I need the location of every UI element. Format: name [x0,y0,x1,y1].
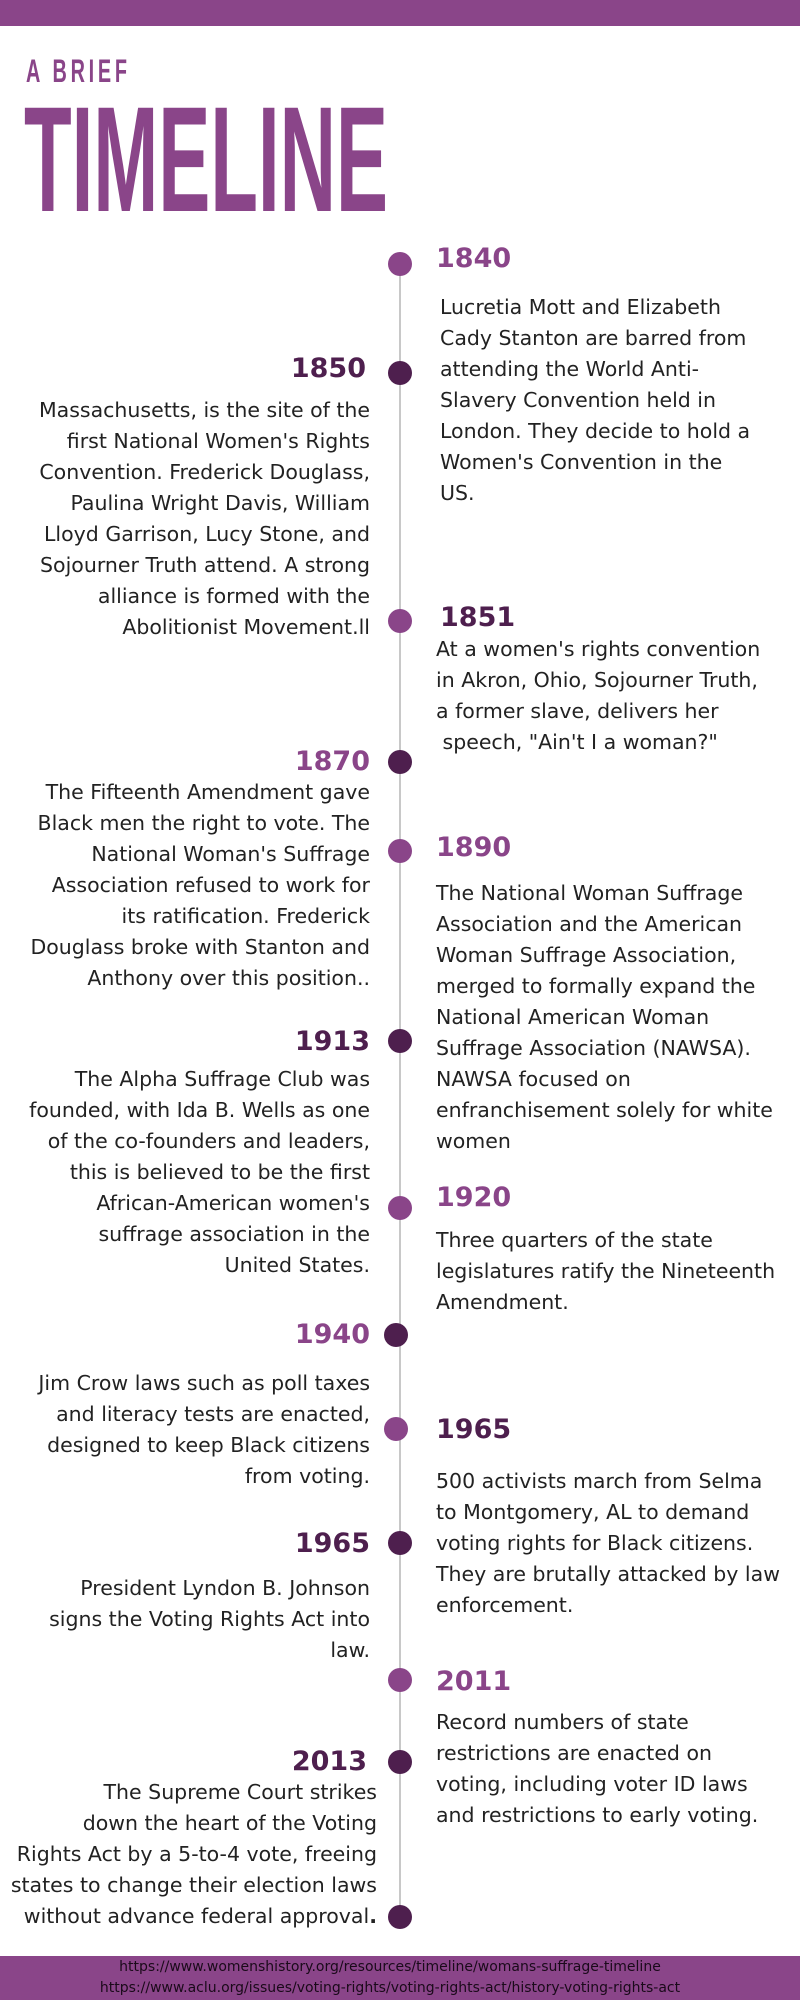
entry 1840 [436,243,750,505]
entry 1965 left: signs the Voting Rights Act into [49,1607,370,1631]
entry 1913 [29,1026,370,1277]
entry 1890: merged to formally expand the [436,974,755,998]
entry 1870: its ratification. Frederick [122,904,370,928]
entry 1840: Slavery Convention held in [440,388,716,412]
entry 1965 right: enforcement. [436,1593,573,1617]
entry 1920: Three quarters of the state [436,1228,713,1252]
entry 1850: first National Women's Rights [67,429,370,453]
entry 1870: 1870 [295,746,370,777]
entry 1965 right [436,1414,780,1617]
entry 1940: 1940 [295,1319,370,1350]
entry 1870: Black men the right to vote. The [38,811,370,835]
entry 1851: speech, "Ain't I a woman?" [443,730,718,754]
entry 1965 right: to Montgomery, AL to demand [436,1500,749,1524]
entry 1940: and literacy tests are enacted, [56,1402,370,1426]
entry 2013: 2013 [292,1746,367,1777]
entry 1913: The Alpha Suffrage Club was [75,1067,370,1091]
footer with sources [0,1956,800,2000]
footer with sources: https://www.aclu.org/issues/voting-rights/voting-rights-act/history-voting-rights-act [100,1980,680,1996]
entry 1840: 1840 [436,243,511,274]
entry 1965 right: 1965 [436,1414,511,1445]
entry 1920: Amendment. [436,1290,569,1314]
entry 1890: The National Woman Suffrage [436,881,743,905]
entry 1840: attending the World Anti- [440,357,699,381]
entry 1890 [436,832,773,1153]
entry 2013 [11,1746,377,1928]
entry 2011: voting, including voter ID laws [436,1772,748,1796]
entry 1870: Association refused to work for [52,873,370,897]
entry 1840: US. [440,481,475,505]
entry 1920: 1920 [436,1182,511,1213]
entry 1913: this is believed to be the first [70,1160,370,1184]
entry 1851: 1851 [440,602,515,633]
entry 1851 [436,602,760,754]
entry 2011: restrictions are enacted on [436,1741,712,1765]
entry 1870: The Fifteenth Amendment gave [46,780,370,804]
entry 1940: from voting. [245,1464,370,1488]
entry 1870 [30,746,370,990]
entry 1890: NAWSA focused on [436,1067,631,1091]
entry 1965 right: voting rights for Black citizens. [436,1531,753,1555]
entry 2011: and restrictions to early voting. [436,1803,758,1827]
text: United States. [225,1253,370,1277]
entry 1850: Convention. Frederick Douglass, [39,460,370,484]
entry 1840: Women's Convention in the [440,450,722,474]
entry 2011: Record numbers of state [436,1710,689,1734]
top bar [0,0,800,26]
entry 1851: a former slave, delivers her [436,699,719,723]
subtitle: a brief: A BRIEF [26,53,131,89]
entry 2013: The Supreme Court strikes [104,1780,377,1804]
entry 2013: Rights Act by a 5-to-4 vote, freeing [17,1842,377,1866]
entry 1890: enfranchisement solely for white [436,1098,773,1122]
entry 1965 left: President Lyndon B. Johnson [80,1576,370,1600]
entry 1890: Woman Suffrage Association, [436,943,736,967]
entry 1850: Massachusetts, is the site of the [39,398,370,422]
entry 1965 right: They are brutally attacked by law [436,1562,780,1586]
entry 1965 left [49,1528,370,1662]
entry 1850: Lloyd Garrison, Lucy Stone, and [44,522,370,546]
entry 1850: alliance is formed with the [98,584,370,608]
entry 1913: of the co-founders and leaders, [48,1129,370,1153]
entry 1940 [37,1319,370,1488]
entry 1890: Suffrage Association (NAWSA). [436,1036,751,1060]
entry 1851: in Akron, Ohio, Sojourner Truth, [436,668,758,692]
entry 1965 right: 500 activists march from Selma [436,1469,762,1493]
entry 1890: Association and the American [436,912,742,936]
title: TIMELINE [24,75,388,243]
entry 1890: women [436,1129,511,1153]
entry 2011 [436,1666,758,1827]
entry 2013: without advance federal approval. [24,1904,377,1928]
entry 1920 [436,1182,775,1314]
entry 1965 left: law. [330,1638,370,1662]
entry 1913: 1913 [295,1026,370,1057]
entry 1920: legislatures ratify the Nineteenth [436,1259,775,1283]
entry 1913: founded, with Ida B. Wells as one [29,1098,370,1122]
entry 1851: At a women's rights convention [436,637,760,661]
entry 1850: Sojourner Truth attend. A strong [40,553,370,577]
entry 2011: 2011 [436,1666,511,1697]
entry 2013: down the heart of the Voting [83,1811,377,1835]
entry 2013: states to change their election laws [11,1873,377,1897]
entry 1840: Lucretia Mott and Elizabeth [440,295,721,319]
entry 1840: London. They decide to hold a [440,419,750,443]
entry 1850: Paulina Wright Davis, William [70,491,370,515]
entry 1940: Jim Crow laws such as poll taxes [38,1371,370,1395]
entry 1890: National American Woman [436,1005,709,1029]
entry 1840: Cady Stanton are barred from [440,326,746,350]
entry 1850: Abolitionist Movement.ll [122,615,370,639]
footer with sources: https://www.womenshistory.org/resources/timeline/womans-suffrage-timeline [119,1959,661,1975]
entry 1870: National Woman's Suffrage [91,842,370,866]
entry 1890: 1890 [436,832,511,863]
entry 1850 [39,353,370,639]
entry 1870: Douglass broke with Stanton and [30,935,370,959]
entry 1940: designed to keep Black citizens [47,1433,370,1457]
entry 1870: Anthony over this position.. [87,966,370,990]
entry 1913: suffrage association in the [98,1222,370,1246]
entry 1913: African-American women's [96,1191,370,1215]
entry 1850: 1850 [291,353,366,384]
entry 1965 left: 1965 [295,1528,370,1559]
timeline axis [399,262,401,1917]
